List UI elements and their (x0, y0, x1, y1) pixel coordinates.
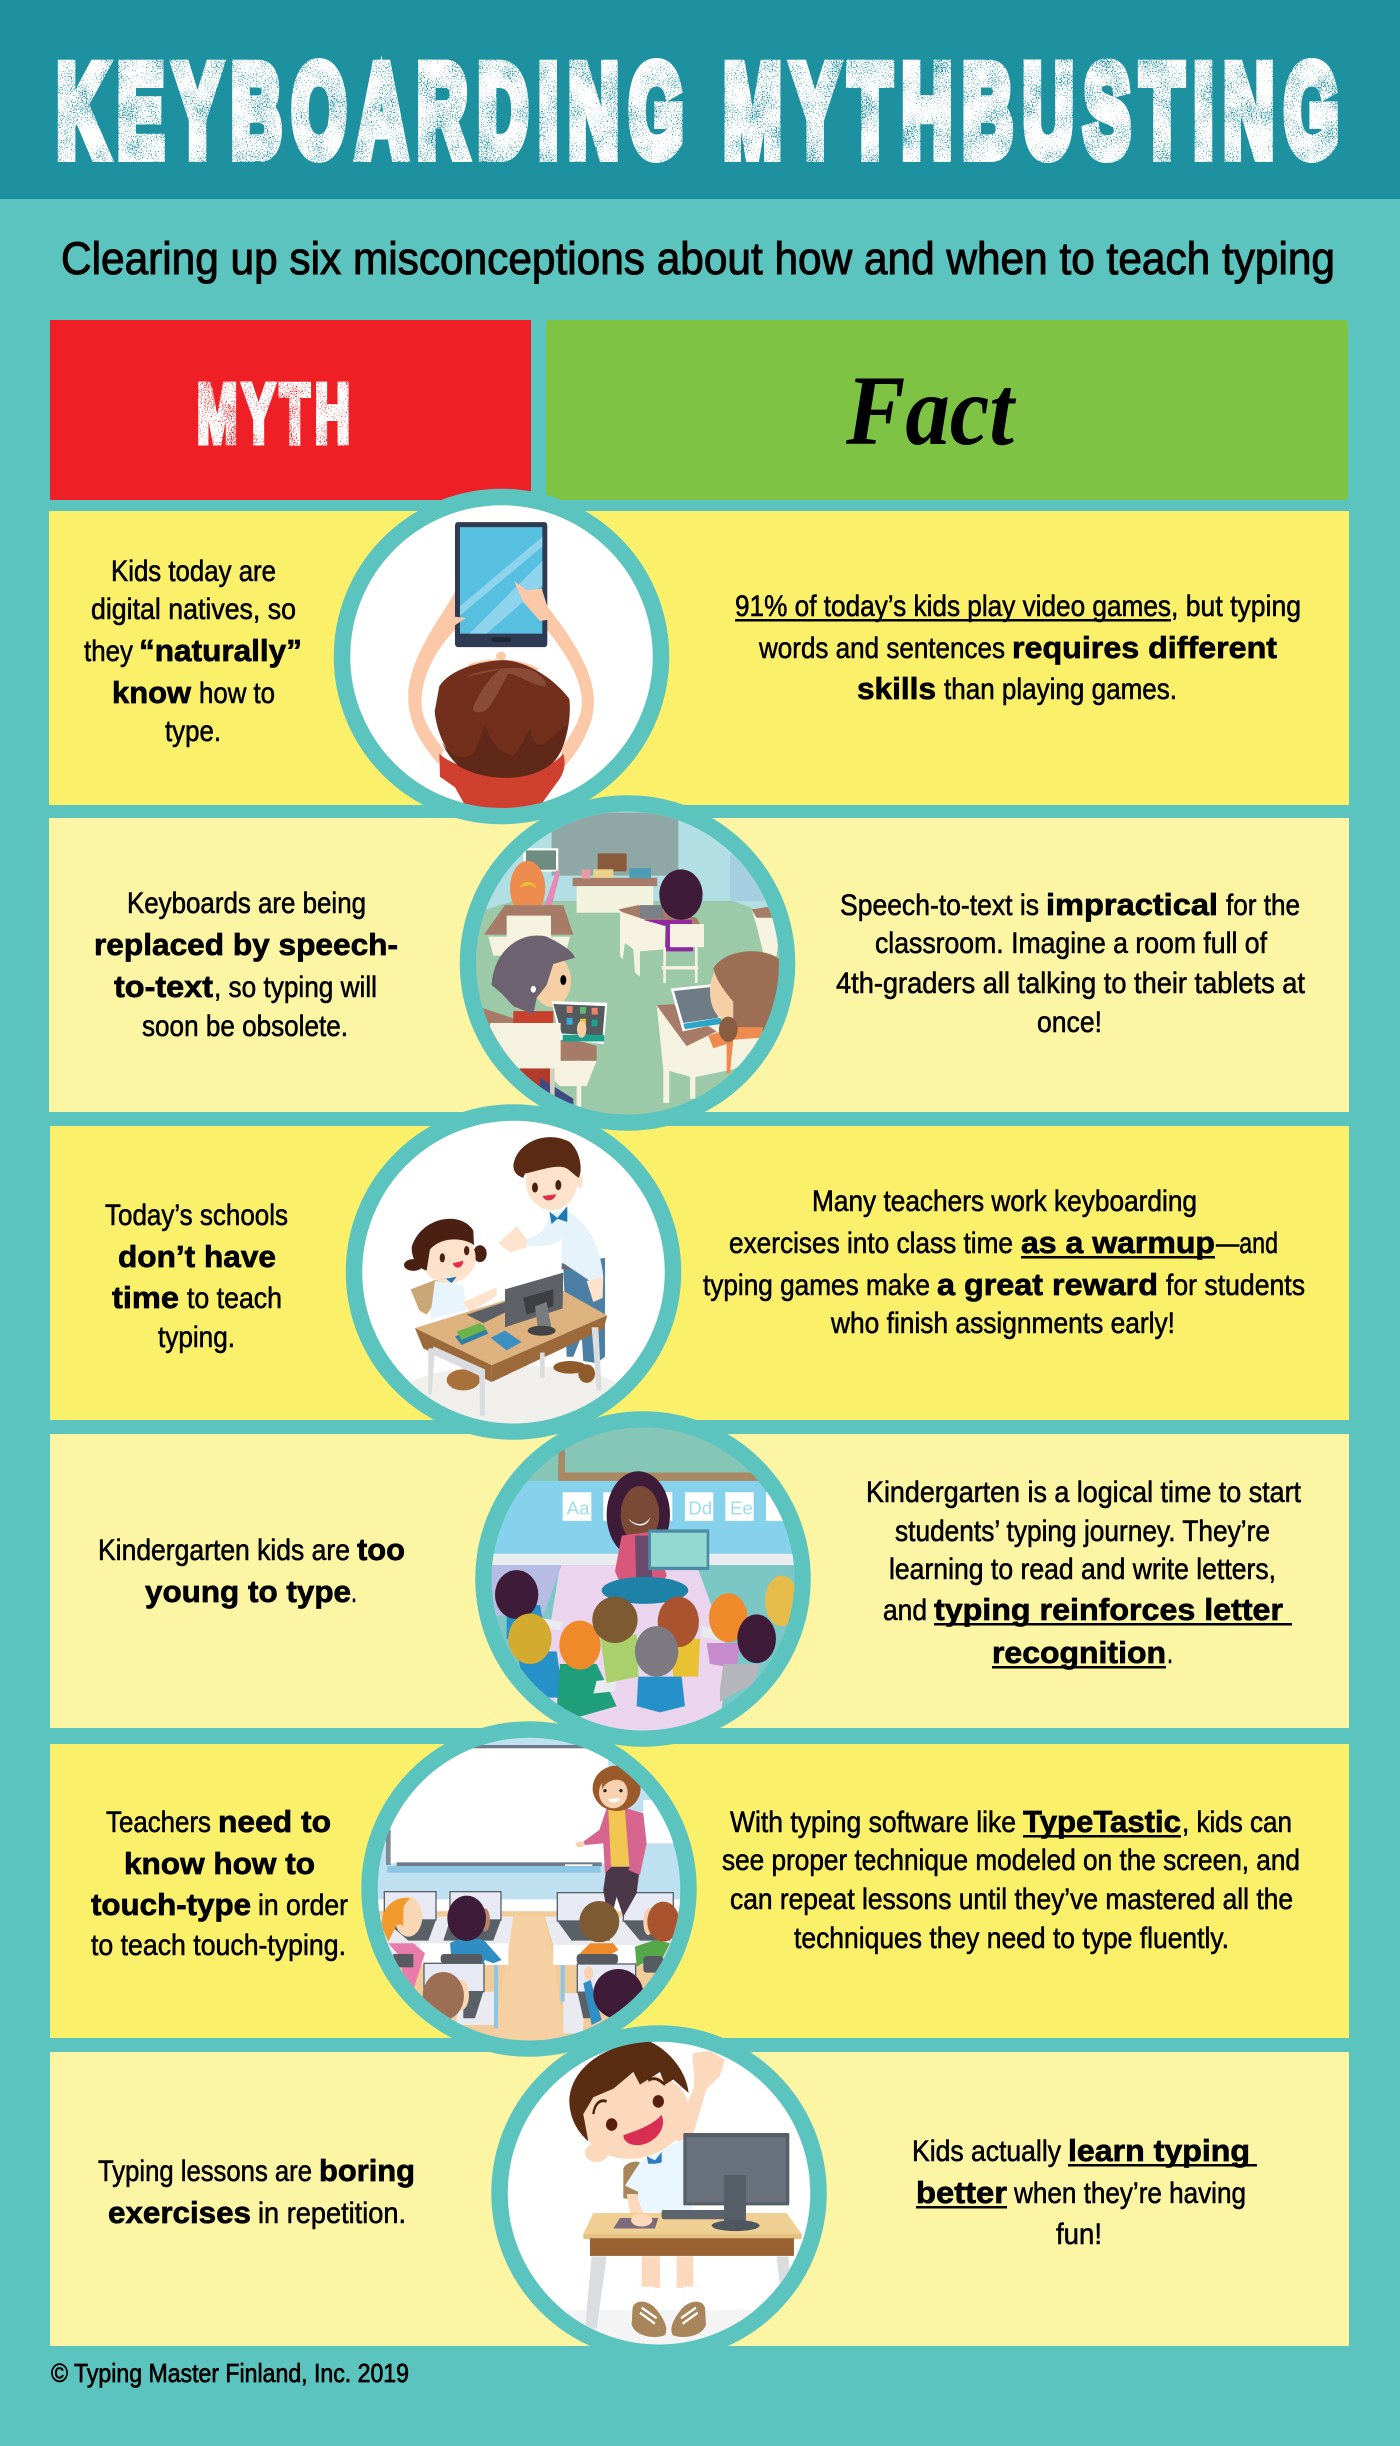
icon: teacher reading to kindergarten class (473, 1420, 813, 1738)
icon: teacher reading to kindergarten class: Aa (567, 1497, 590, 1519)
icon: child using tablet (342, 497, 661, 816)
fact 3 text: who finish assignments early! (830, 1307, 1175, 1340)
myth 2 text: to-text (114, 969, 213, 1004)
fact 6 text: Kids actually (912, 2135, 1061, 2168)
fact 4 text: Kindergarten is a logical time to start (866, 1476, 1302, 1509)
myth 5 text: in order (258, 1889, 348, 1922)
myth 3 text: don’t have (118, 1239, 276, 1274)
panel: row 4 background (50, 1434, 1349, 1728)
myth 6 text: in repetition. (258, 2197, 406, 2230)
fact 6 text: when they’re having (1013, 2177, 1246, 2210)
fact 1 text: skills (857, 671, 936, 706)
panel: row 5 background (50, 1744, 1349, 2038)
fact 4 text (866, 1476, 1302, 1670)
fact 5 text: , kids can (1182, 1806, 1292, 1839)
fact 5 text: TypeTastic (1023, 1804, 1181, 1839)
fact 2 text: impractical (1046, 887, 1218, 922)
panel: myth header (50, 320, 531, 500)
fact 3 text: as a warmup (1021, 1225, 1215, 1260)
myth 1 text (84, 555, 302, 748)
fact 4 text: recognition (992, 1635, 1166, 1670)
fact 2 text (836, 887, 1306, 1039)
panel: row 2 background (49, 818, 1349, 1112)
fact 5 text: see proper technique modeled on the screen, and (722, 1844, 1300, 1877)
myth 3 text: typing. (158, 1321, 235, 1354)
myth 5 text: Teachers (106, 1806, 211, 1839)
myth 6 text: boring (319, 2153, 415, 2188)
myth 5 text: need to (218, 1804, 331, 1839)
myth 1 text: type. (165, 715, 221, 748)
fact 2 text: 4th-graders all talking to their tablets at (836, 967, 1306, 1000)
icon: classroom with tablets (460, 804, 797, 1122)
fact 2 text: once! (1037, 1006, 1102, 1039)
myth 4 text: young to type (145, 1574, 351, 1609)
fact 5 text (722, 1804, 1300, 1955)
myth 5 text (91, 1804, 348, 1962)
fact 1 text: requires different (1012, 630, 1277, 665)
fact 6 text (912, 2133, 1257, 2251)
footer copyright: © Typing Master Finland, Inc. 2019 (51, 2358, 409, 2388)
fact 1 text: , but typing (1171, 590, 1301, 623)
fact 3 text: typing games make (703, 1269, 930, 1302)
fact 1 text: words and sentences (758, 632, 1005, 665)
fact 6 text: learn typing (1068, 2133, 1250, 2168)
myth 1 text: digital natives, so (91, 593, 296, 626)
myth 1 text: know (112, 675, 192, 710)
header banner (0, 0, 1400, 199)
fact heading: Fact (845, 355, 1017, 466)
fact 5 text: techniques they need to type fluently. (794, 1922, 1229, 1955)
fact 6 text: better (916, 2175, 1007, 2210)
myth 2 text: replaced by speech- (94, 927, 398, 962)
subtitle: Clearing up six misconceptions about how and when to teach typing (61, 233, 1335, 284)
fact 3 text: Many teachers work keyboarding (812, 1185, 1197, 1218)
fact 2 text: for the (1226, 889, 1300, 922)
fact 1 text: than playing games. (944, 673, 1177, 706)
panel: row 6 background (50, 2052, 1349, 2346)
icon: teacher reading to kindergarten class: Dd (688, 1497, 712, 1519)
panel: row 1 background (49, 511, 1349, 805)
fact 4 text: . (1167, 1637, 1173, 1670)
panel: row 3 background (50, 1126, 1349, 1420)
panel: fact header (546, 320, 1348, 500)
myth 4 text: too (357, 1532, 405, 1567)
fact 1 text: 91% of today’s kids play video games (735, 590, 1171, 623)
fact 3 text (703, 1185, 1305, 1340)
myth 6 text: Typing lessons are (98, 2155, 312, 2188)
myth 3 text (105, 1199, 288, 1354)
myth 1 text: Kids today are (111, 555, 276, 588)
myth 4 text (98, 1532, 405, 1609)
myth 3 text: time (112, 1280, 179, 1315)
myth 3 text: to teach (187, 1282, 282, 1315)
fact 3 text: for students (1166, 1269, 1305, 1302)
myth 1 text: how to (199, 677, 275, 710)
icon: teacher reading to kindergarten class: Ee (730, 1497, 753, 1519)
fact 1 text (735, 590, 1301, 706)
fact 4 text: learning to read and write letters, (889, 1553, 1276, 1586)
icon: teacher at whiteboard with students on laptops (370, 1730, 688, 2048)
fact 2 text: classroom. Imagine a room full of (875, 927, 1268, 960)
myth 1 text: “naturally” (139, 633, 302, 668)
fact 4 text: students’ typing journey. They’re (895, 1515, 1270, 1548)
myth 5 text: know how to (124, 1846, 315, 1881)
fact 3 text: exercises into class time (729, 1227, 1013, 1260)
fact 4 text: and (883, 1594, 927, 1627)
myth 1 text: they (84, 635, 133, 668)
fact 2 text: Speech-to-text is (840, 889, 1039, 922)
fact 3 text: —and (1216, 1227, 1278, 1260)
myth 2 text: , so typing will (214, 971, 377, 1004)
myth 2 text (94, 887, 398, 1043)
myth 5 text: to teach touch-typing. (91, 1929, 346, 1962)
myth 4 text: Kindergarten kids are (98, 1534, 350, 1567)
fact 6 text: fun! (1056, 2218, 1102, 2251)
myth 3 text: Today’s schools (105, 1199, 288, 1232)
myth heading: MYTH (197, 367, 355, 460)
fact 5 text: can repeat lessons until they’ve mastered all the (730, 1883, 1293, 1916)
myth 5 text: touch-type (91, 1887, 251, 1922)
icon: happy boy at desk with computer (500, 2034, 820, 2352)
myth 6 text: exercises (108, 2195, 251, 2230)
fact 5 text: With typing software like (730, 1806, 1016, 1839)
fact 3 text: a great reward (937, 1267, 1158, 1302)
fact 4 text: typing reinforces letter (934, 1592, 1283, 1627)
myth 6 text (98, 2153, 415, 2230)
myth 2 text: Keyboards are being (127, 887, 366, 920)
myth 4 text: . (351, 1576, 357, 1609)
myth 2 text: soon be obsolete. (142, 1010, 348, 1043)
icon: teacher helping student at computer (354, 1112, 673, 1432)
